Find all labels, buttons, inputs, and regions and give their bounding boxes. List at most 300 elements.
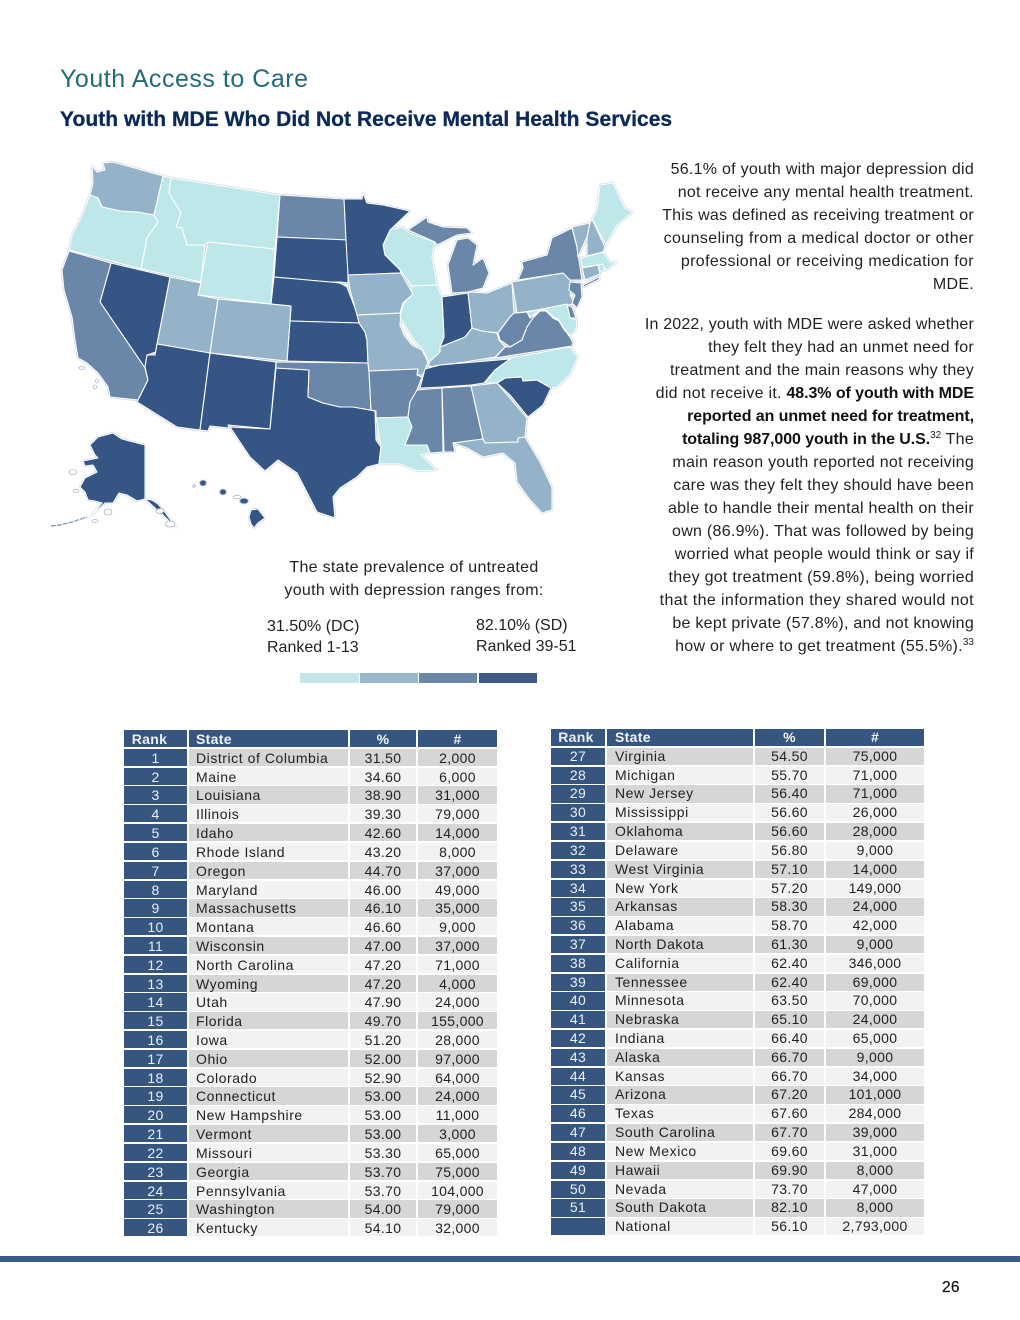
row: Wyoming: 13 <box>147 976 164 992</box>
row: Michigan: Michigan <box>615 767 675 783</box>
row: Florida: Florida <box>196 1013 243 1029</box>
row: Delaware: 9,000 <box>857 842 893 858</box>
state: New York <box>518 228 582 280</box>
row: Maine: 2 <box>151 769 160 785</box>
row: Kentucky: 26 <box>147 1220 164 1236</box>
row: Michigan <box>551 767 924 784</box>
row: Kentucky: 32,000 <box>435 1220 480 1236</box>
second paragraph: that the information they shared would not <box>660 592 974 609</box>
row: Tennessee: Tennessee <box>615 974 688 990</box>
row: California: California <box>615 955 680 971</box>
row: Illinois <box>124 805 497 822</box>
row: Virginia: 54.50 <box>771 748 808 764</box>
row: Wisconsin <box>124 937 497 954</box>
row: National <box>551 1218 924 1235</box>
row: California: 38 <box>570 955 586 971</box>
table: ranks 27 to 51 and national <box>551 729 924 1235</box>
row: Indiana: 42 <box>570 1030 586 1046</box>
row: Indiana: 65,000 <box>853 1030 897 1046</box>
row: Maine <box>124 768 497 785</box>
row: Ohio <box>124 1050 497 1067</box>
row: Hawaii <box>551 1162 924 1179</box>
row: Alaska: 9,000 <box>857 1049 893 1065</box>
row: Indiana: 66.40 <box>771 1030 808 1046</box>
row: Nevada: Nevada <box>615 1180 667 1196</box>
state: Massachusetts <box>581 252 617 270</box>
row: Wyoming <box>124 975 497 992</box>
row: Vermont: 21 <box>147 1126 164 1142</box>
row: Louisiana <box>124 786 497 804</box>
second paragraph: did not receive it. 48.3% of youth with MDE <box>656 385 974 402</box>
second paragraph <box>645 316 974 655</box>
row: Rhode Island: 6 <box>151 844 160 860</box>
state: North Dakota <box>277 195 348 240</box>
row: Georgia <box>124 1163 497 1180</box>
row: Hawaii: 69.90 <box>771 1162 808 1178</box>
state: Utah <box>157 277 218 353</box>
row: Virginia: 27 <box>570 748 586 764</box>
row: Ohio: Ohio <box>196 1051 228 1067</box>
state: Wisconsin <box>383 227 437 286</box>
state: Hawaii big island <box>249 509 265 528</box>
row: New York: 57.20 <box>771 880 808 896</box>
row: Maine: Maine <box>196 769 237 785</box>
state: Mississippi <box>405 388 443 453</box>
table header <box>124 730 497 747</box>
row: Ohio: 97,000 <box>435 1051 480 1067</box>
state: Virginia <box>495 311 573 358</box>
row: Maine: 6,000 <box>439 769 476 785</box>
row: New York: 34 <box>570 880 586 896</box>
row: Missouri: Missouri <box>196 1145 253 1161</box>
second paragraph: able to handle their mental health on their <box>668 500 974 517</box>
second paragraph: care was they felt they should have been <box>673 477 974 494</box>
state: Oregon <box>69 195 158 269</box>
row: Arizona <box>551 1086 924 1104</box>
row: New Jersey: New Jersey <box>615 785 694 801</box>
row: Delaware <box>551 842 924 859</box>
row: Florida: 15 <box>147 1013 164 1029</box>
row: Iowa: Iowa <box>196 1032 228 1048</box>
legend low label: 31.50% (DC) <box>267 618 359 635</box>
row: Massachusetts: 46.10 <box>365 900 401 916</box>
row: Oklahoma <box>551 823 924 840</box>
row: Montana: Montana <box>196 919 254 935</box>
row: Vermont: Vermont <box>196 1126 252 1142</box>
row: Oregon: Oregon <box>196 863 246 879</box>
row: New Mexico <box>551 1143 924 1160</box>
row: Florida <box>124 1012 497 1029</box>
row: West Virginia: 57.10 <box>771 861 808 877</box>
state: North Carolina <box>485 347 578 388</box>
legend caption: The state prevalence of untreated <box>289 559 539 576</box>
row: Massachusetts: 35,000 <box>435 900 480 916</box>
row: Arizona: 101,000 <box>849 1086 901 1102</box>
row: Iowa: 28,000 <box>435 1032 480 1048</box>
row: Massachusetts: 9 <box>151 900 160 916</box>
row: South Carolina: 47 <box>570 1124 586 1140</box>
row: Nebraska: Nebraska <box>615 1011 679 1027</box>
state: Maine <box>592 183 633 245</box>
row: Colorado: 18 <box>147 1070 164 1086</box>
state: Georgia <box>471 383 527 443</box>
state: Kentucky <box>429 328 505 367</box>
table header: State <box>196 731 232 747</box>
row: North Dakota: North Dakota <box>615 936 704 952</box>
row: Alaska <box>551 1049 924 1066</box>
state: Texas <box>230 368 381 518</box>
legend colour scale <box>300 673 537 683</box>
row: Wisconsin: 47.00 <box>365 938 401 954</box>
row: Tennessee: 69,000 <box>853 974 897 990</box>
row: Louisiana: 3 <box>151 787 160 803</box>
state: Hawaii Kauai <box>200 480 206 486</box>
row: West Virginia: 33 <box>570 861 586 877</box>
row: Iowa: 16 <box>147 1032 164 1048</box>
state: Florida <box>453 437 552 513</box>
row: Texas: 284,000 <box>849 1105 901 1121</box>
row: Texas: 46 <box>570 1105 586 1121</box>
row: Georgia: 53.70 <box>365 1164 401 1180</box>
state: Alaska panhandle <box>145 499 176 527</box>
row: Kansas <box>551 1068 924 1085</box>
row: Wisconsin: 11 <box>148 938 163 954</box>
row: Nevada: 73.70 <box>771 1180 808 1196</box>
row: Minnesota <box>551 992 924 1010</box>
row: Maryland: 49,000 <box>435 882 480 898</box>
row: Vermont: 3,000 <box>439 1126 476 1142</box>
state: Minnesota <box>344 193 410 275</box>
row: Maryland <box>124 881 497 898</box>
state: Delaware <box>567 305 576 318</box>
row: Mississippi: 56.60 <box>771 804 808 820</box>
row: Louisiana: 38.90 <box>365 787 401 803</box>
row: Georgia: 23 <box>147 1164 164 1180</box>
row: Nevada <box>551 1180 924 1198</box>
row: Idaho: Idaho <box>196 825 234 841</box>
state: Michigan lower peninsula <box>448 238 489 293</box>
row: North Carolina: 47.20 <box>365 957 401 973</box>
state: Rhode Island <box>598 264 605 272</box>
row: Michigan: 28 <box>570 767 586 783</box>
row: Wisconsin: Wisconsin <box>196 938 265 954</box>
row: Tennessee: 62.40 <box>771 974 808 990</box>
state: Maryland <box>527 304 577 336</box>
row: Pennsylvania <box>124 1182 497 1199</box>
row: Idaho: 42.60 <box>365 825 401 841</box>
row: Wyoming: 4,000 <box>439 976 476 992</box>
state: West Virginia <box>498 311 540 347</box>
row: New Mexico: 48 <box>570 1143 586 1159</box>
row: Mississippi: 30 <box>570 804 586 820</box>
subtitle: Youth with MDE Who Did Not Receive Mental Health Services <box>60 108 672 131</box>
first paragraph: not receive any mental health treatment. <box>678 184 974 201</box>
state: California <box>62 251 148 400</box>
row: South Carolina <box>551 1124 924 1141</box>
row: Minnesota: Minnesota <box>615 992 685 1008</box>
legend high label <box>476 617 577 655</box>
row: Connecticut: 19 <box>147 1088 164 1104</box>
row: Mississippi <box>551 804 924 821</box>
row: Minnesota: 63.50 <box>771 992 808 1008</box>
row: Colorado: 64,000 <box>435 1070 480 1086</box>
state: Oklahoma <box>276 362 376 411</box>
row: West Virginia: West Virginia <box>615 861 704 877</box>
row: District of Columbia: District of Columbia <box>196 750 328 766</box>
row: Colorado: Colorado <box>196 1070 257 1086</box>
row: South Carolina: South Carolina <box>615 1124 715 1140</box>
row: Utah: 14 <box>147 994 164 1010</box>
row: Texas: 67.60 <box>771 1105 808 1121</box>
row: Alaska: Alaska <box>615 1049 660 1065</box>
page number: 26 <box>942 1279 960 1296</box>
row: Kansas: 66.70 <box>771 1068 808 1084</box>
first paragraph: professional or receiving medication for <box>681 253 974 270</box>
row: Nevada: 50 <box>570 1180 586 1196</box>
row: West Virginia <box>551 861 924 878</box>
row: South Carolina: 39,000 <box>853 1124 897 1140</box>
row: Utah <box>124 993 497 1011</box>
row: District of Columbia: 2,000 <box>439 750 476 766</box>
row: Pennsylvania: 104,000 <box>431 1182 484 1198</box>
row: Arkansas: 58.30 <box>771 898 808 914</box>
row: Wyoming: 47.20 <box>365 976 401 992</box>
second paragraph: they got treatment (59.8%), being worried <box>669 569 974 586</box>
row: Kansas: 44 <box>570 1068 586 1084</box>
row: Alaska: 66.70 <box>771 1049 808 1065</box>
state: Arizona <box>137 344 210 430</box>
row: Massachusetts: Massachusetts <box>196 900 297 916</box>
row: Wyoming: Wyoming <box>196 976 258 992</box>
row: Arizona: Arizona <box>615 1086 666 1102</box>
row: Idaho <box>124 824 497 841</box>
first paragraph: This was defined as receiving treatment or <box>662 207 974 224</box>
row: District of Columbia: 1 <box>151 750 160 766</box>
row: Delaware: Delaware <box>615 842 679 858</box>
row: Montana: 10 <box>147 919 164 935</box>
row: South Carolina: 67.70 <box>771 1124 808 1140</box>
table header: Rank <box>558 729 594 745</box>
row: Alabama: Alabama <box>615 917 674 933</box>
row: Florida: 49.70 <box>365 1013 401 1029</box>
legend low label <box>267 618 359 656</box>
row: Washington: 54.00 <box>365 1201 401 1217</box>
row: Oklahoma: 56.60 <box>771 823 808 839</box>
row: Tennessee <box>551 974 924 991</box>
row: Kansas: 34,000 <box>853 1068 897 1084</box>
row: Missouri: 53.30 <box>365 1145 401 1161</box>
row: Minnesota: 70,000 <box>853 992 897 1008</box>
row: Delaware: 56.80 <box>771 842 808 858</box>
row: Maryland: Maryland <box>196 882 258 898</box>
row: Texas <box>551 1105 924 1122</box>
second paragraph: worried what people would think or say if <box>675 546 974 563</box>
row: Hawaii: 49 <box>570 1162 586 1178</box>
row: Connecticut: Connecticut <box>196 1088 276 1104</box>
row: Oregon <box>124 862 497 879</box>
row: Rhode Island <box>124 843 497 860</box>
row: Pennsylvania: 24 <box>147 1182 164 1198</box>
row: Nebraska: 24,000 <box>853 1011 897 1027</box>
row: South Dakota: 51 <box>570 1199 586 1215</box>
row: Utah: 24,000 <box>435 994 480 1010</box>
row: Rhode Island: 43.20 <box>365 844 401 860</box>
row: Wisconsin: 37,000 <box>435 938 480 954</box>
row: Idaho: 14,000 <box>435 825 480 841</box>
state: Louisiana <box>376 417 437 471</box>
row: Utah: 47.90 <box>365 994 401 1010</box>
row: Indiana <box>551 1030 924 1047</box>
row: Vermont: 53.00 <box>365 1126 401 1142</box>
state: Long Island <box>583 277 600 287</box>
row: New York: New York <box>615 880 679 896</box>
state: Michigan upper peninsula <box>408 217 472 245</box>
row: Rhode Island: Rhode Island <box>196 844 285 860</box>
row: South Dakota: 82.10 <box>771 1199 808 1215</box>
second paragraph: they felt they had an unmet need for <box>708 339 974 356</box>
row: North Dakota: 61.30 <box>771 936 808 952</box>
row: Alabama <box>551 917 924 934</box>
row: Virginia <box>551 748 924 765</box>
legend caption: youth with depression ranges from: <box>284 582 544 599</box>
table header: # <box>871 729 879 745</box>
row: Hawaii: 8,000 <box>857 1162 893 1178</box>
state: New Mexico <box>200 353 276 431</box>
state: Iowa <box>348 273 413 315</box>
row: Rhode Island: 8,000 <box>439 844 476 860</box>
legend high label: 82.10% (SD) <box>476 617 568 634</box>
second paragraph: reported an unmet need for treatment, <box>687 408 974 425</box>
row: California: 62.40 <box>771 955 808 971</box>
state: Montana <box>169 178 280 249</box>
row: Colorado <box>124 1069 497 1086</box>
row: National: 56.10 <box>771 1218 808 1234</box>
table header: % <box>783 729 796 745</box>
second paragraph: how or where to get treatment (55.5%).33 <box>675 637 974 655</box>
row: Oklahoma: 28,000 <box>853 823 897 839</box>
row: Connecticut: 24,000 <box>435 1088 480 1104</box>
row: New Hampshire <box>124 1106 497 1123</box>
legend caption <box>284 559 544 599</box>
state: Tennessee <box>420 359 510 388</box>
row: Washington: Washington <box>196 1201 275 1217</box>
row: Nebraska <box>551 1011 924 1028</box>
row: District of Columbia <box>124 749 497 766</box>
row: New Jersey: 29 <box>570 785 586 801</box>
state: Missouri <box>357 313 428 375</box>
row: Kentucky <box>124 1219 497 1236</box>
row: Illinois: 39.30 <box>365 806 401 822</box>
legend high label: Ranked 39-51 <box>476 638 577 655</box>
state: Alaska <box>80 433 145 517</box>
row: Oregon: 7 <box>151 863 160 879</box>
table header: Rank <box>132 731 167 747</box>
row: Arkansas <box>551 898 924 916</box>
row: California <box>551 955 924 972</box>
row: Ohio: 52.00 <box>365 1051 401 1067</box>
row: Montana: 46.60 <box>365 919 401 935</box>
row: Missouri <box>124 1144 497 1161</box>
row: North Carolina: 71,000 <box>435 957 480 973</box>
state: Alabama <box>442 386 483 452</box>
row: Oregon: 44.70 <box>365 863 401 879</box>
row: Arkansas: 35 <box>570 898 586 914</box>
second paragraph: be kept private (57.8%), and not knowing <box>672 615 974 632</box>
row: New York <box>551 880 924 897</box>
second paragraph: totaling 987,000 youth in the U.S.32 The <box>682 430 974 448</box>
first paragraph: counseling from a medical doctor or other <box>664 230 974 247</box>
row: Nebraska: 41 <box>570 1011 586 1027</box>
row: New Jersey: 71,000 <box>853 785 897 801</box>
row: Missouri: 22 <box>147 1145 164 1161</box>
row: Pennsylvania: Pennsylvania <box>196 1182 286 1198</box>
state: Vermont <box>572 223 590 257</box>
row: Maine: 34.60 <box>365 769 401 785</box>
row: Alabama: 42,000 <box>853 917 897 933</box>
row: Colorado: 52.90 <box>365 1070 401 1086</box>
row: Kansas: Kansas <box>615 1068 665 1084</box>
row: North Carolina <box>124 956 497 973</box>
row: Georgia: 75,000 <box>435 1164 480 1180</box>
row: Alabama: 58.70 <box>771 917 808 933</box>
row: North Dakota: 37 <box>570 936 586 952</box>
row: South Dakota: 8,000 <box>857 1199 893 1215</box>
row: Missouri: 65,000 <box>435 1145 480 1161</box>
row: Oklahoma: 31 <box>570 823 586 839</box>
row: Vermont <box>124 1125 497 1142</box>
row: New Hampshire: 11,000 <box>436 1107 479 1123</box>
row: Iowa <box>124 1031 497 1048</box>
small islands and Aleutian chain <box>51 367 241 527</box>
row: National: National <box>615 1218 671 1234</box>
row: New Hampshire: 20 <box>147 1107 164 1123</box>
row: Connecticut: 53.00 <box>365 1088 401 1104</box>
state: Connecticut <box>582 265 600 280</box>
table header: State <box>615 729 651 745</box>
row: Oklahoma: Oklahoma <box>615 823 683 839</box>
row: Virginia: Virginia <box>615 748 666 764</box>
state: Nebraska <box>271 277 359 323</box>
row: New Hampshire: New Hampshire <box>196 1107 303 1123</box>
row: Michigan: 55.70 <box>771 767 808 783</box>
row: Oregon: 37,000 <box>435 863 480 879</box>
row: North Dakota: 9,000 <box>857 936 893 952</box>
row: Mississippi: 26,000 <box>853 804 897 820</box>
row: Arkansas: Arkansas <box>615 898 678 914</box>
row: Mississippi: Mississippi <box>615 804 689 820</box>
row: Connecticut <box>124 1087 497 1105</box>
row: Louisiana: Louisiana <box>196 787 261 803</box>
row: North Carolina: North Carolina <box>196 957 294 973</box>
table header: # <box>453 731 462 747</box>
row: Illinois: 79,000 <box>435 806 480 822</box>
row: New Mexico: 31,000 <box>853 1143 897 1159</box>
row: Washington: 79,000 <box>435 1201 480 1217</box>
row: Delaware: 32 <box>570 842 586 858</box>
row: Nebraska: 65.10 <box>771 1011 808 1027</box>
table header: % <box>377 731 389 747</box>
table: ranks 1 to 26 <box>124 730 497 1236</box>
row: Georgia: Georgia <box>196 1164 250 1180</box>
state: Nevada <box>100 263 170 368</box>
row: West Virginia: 14,000 <box>853 861 897 877</box>
second paragraph: In 2022, youth with MDE were asked whether <box>645 316 974 333</box>
state: Ohio <box>468 283 514 333</box>
row: Maryland: 8 <box>151 882 160 898</box>
choropleth map of the United States <box>51 160 634 529</box>
row: Nevada: 47,000 <box>853 1180 897 1196</box>
row: Indiana: Indiana <box>615 1030 665 1046</box>
